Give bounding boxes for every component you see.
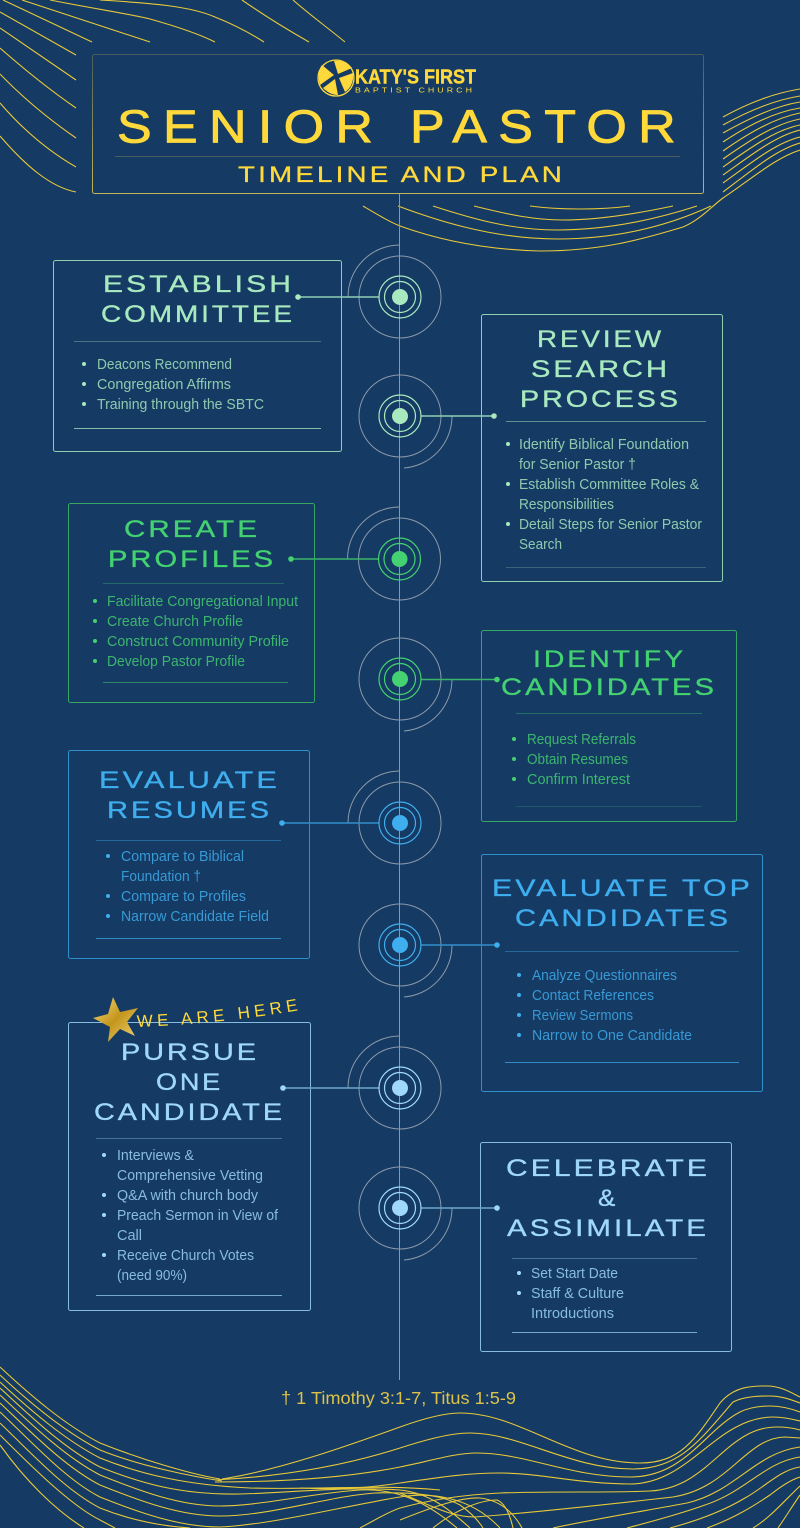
heading: CANDIDATES xyxy=(501,674,717,701)
bullet list: Deacons Recommend xyxy=(97,357,232,373)
panel: establish committee xyxy=(54,260,342,452)
bullet list: Staff & Culture xyxy=(531,1286,624,1302)
heading: PROFILES xyxy=(108,546,276,573)
bullet list xyxy=(506,437,702,553)
logo subline: BAPTIST CHURCH xyxy=(355,88,475,94)
bullet list: Introductions xyxy=(531,1306,614,1322)
timeline node 3 xyxy=(288,507,440,600)
bullet list: Congregation Affirms xyxy=(97,377,231,393)
bottom wave lines xyxy=(0,1367,800,1528)
bullet list: Compare to Biblical xyxy=(121,849,244,865)
bullet list: Interviews & xyxy=(117,1148,194,1164)
heading: SEARCH xyxy=(531,356,670,383)
bullet list: Facilitate Congregational Input xyxy=(107,594,298,610)
bullet list xyxy=(106,849,269,925)
bullet list: Responsibilities xyxy=(519,497,614,513)
heading: RESUMES xyxy=(107,797,272,824)
heading: ASSIMILATE xyxy=(507,1215,709,1242)
top-right wave lines xyxy=(363,89,800,251)
bullet list: Establish Committee Roles & xyxy=(519,477,699,493)
subtitle: TIMELINE AND PLAN xyxy=(238,162,565,187)
bullet list: Confirm Interest xyxy=(527,772,630,788)
heading: CANDIDATE xyxy=(94,1099,285,1126)
heading: IDENTIFY xyxy=(533,646,686,673)
bullet list: Review Sermons xyxy=(532,1008,633,1024)
timeline node 7 xyxy=(280,1036,441,1129)
bullet list: Receive Church Votes xyxy=(117,1248,254,1264)
panel: evaluate resumes xyxy=(68,750,310,958)
heading: ONE xyxy=(156,1069,223,1096)
timeline node 1 xyxy=(295,245,441,338)
bullet list xyxy=(82,357,264,413)
title: SENIOR PASTOR xyxy=(117,100,687,152)
bullet list: for Senior Pastor † xyxy=(519,457,636,473)
heading: & xyxy=(598,1185,618,1212)
timeline node 8 xyxy=(359,1167,500,1260)
bullet list: Comprehensive Vetting xyxy=(117,1168,263,1184)
logo wordmark: KATY'S FIRST xyxy=(355,66,476,88)
bullet list: (need 90%) xyxy=(117,1268,187,1284)
heading: CELEBRATE xyxy=(506,1155,710,1182)
panel: pursue one candidate xyxy=(68,1022,310,1310)
bullet list: Request Referrals xyxy=(527,732,636,748)
heading xyxy=(101,271,295,328)
heading: ESTABLISH xyxy=(103,271,294,298)
heading: CANDIDATES xyxy=(515,905,731,932)
bullet list: Detail Steps for Senior Pastor xyxy=(519,517,702,533)
bullet list xyxy=(512,732,636,788)
heading: PURSUE xyxy=(121,1039,259,1066)
heading: EVALUATE TOP xyxy=(492,875,753,902)
timeline node 4 xyxy=(359,638,500,731)
heading: REVIEW xyxy=(537,326,664,353)
bullet list: Contact References xyxy=(532,988,654,1004)
bullet list xyxy=(517,968,692,1044)
bullet list: Analyze Questionnaires xyxy=(532,968,677,984)
heading xyxy=(520,326,681,413)
footnote: † 1 Timothy 3:1-7, Titus 1:5-9 xyxy=(281,1388,516,1408)
timeline node 5 xyxy=(279,771,441,864)
bullet list: Training through the SBTC xyxy=(97,397,264,413)
bullet list: Set Start Date xyxy=(531,1266,618,1282)
central timeline xyxy=(398,194,400,1380)
bullet list: Narrow to One Candidate xyxy=(532,1028,692,1044)
heading xyxy=(492,875,753,932)
bullet list xyxy=(517,1266,624,1322)
bullet list: Create Church Profile xyxy=(107,614,243,630)
heading xyxy=(501,646,717,701)
heading xyxy=(94,1039,285,1126)
heading xyxy=(108,516,276,573)
bullet list: Q&A with church body xyxy=(117,1188,259,1204)
timeline node 6 xyxy=(359,904,500,997)
bullet list: Foundation † xyxy=(121,869,201,885)
bullet list xyxy=(102,1148,279,1284)
icon: church emblem xyxy=(318,60,354,96)
heading xyxy=(99,767,280,824)
heading: EVALUATE xyxy=(99,767,280,794)
panel: evaluate top candidates xyxy=(482,854,762,1092)
icon: gold star xyxy=(93,997,138,1042)
bullet list xyxy=(93,594,298,670)
timeline node 2 xyxy=(359,375,497,468)
bullet list: Call xyxy=(117,1228,142,1244)
bullet list: Obtain Resumes xyxy=(527,752,628,768)
bullet list: Narrow Candidate Field xyxy=(121,909,269,925)
bullet list: Develop Pastor Profile xyxy=(107,654,245,670)
heading: PROCESS xyxy=(520,386,681,413)
we are here callout: WE ARE HERE xyxy=(136,999,298,1027)
logo xyxy=(318,60,476,96)
panel: identify candidates xyxy=(482,630,736,822)
bullet list: Construct Community Profile xyxy=(107,634,289,650)
heading: COMMITTEE xyxy=(101,301,295,328)
bullet list: Preach Sermon in View of xyxy=(117,1208,279,1224)
bullet list: Identify Biblical Foundation xyxy=(519,437,689,453)
panel: create profiles xyxy=(68,504,314,702)
heading: CREATE xyxy=(124,516,260,543)
panel: review search process xyxy=(482,314,722,582)
bullet list: Search xyxy=(519,537,562,553)
header panel xyxy=(92,54,704,194)
panel: celebrate and assimilate xyxy=(480,1142,732,1352)
bullet list: Compare to Profiles xyxy=(121,889,246,905)
top-left wave lines xyxy=(0,0,345,192)
heading xyxy=(506,1155,710,1242)
